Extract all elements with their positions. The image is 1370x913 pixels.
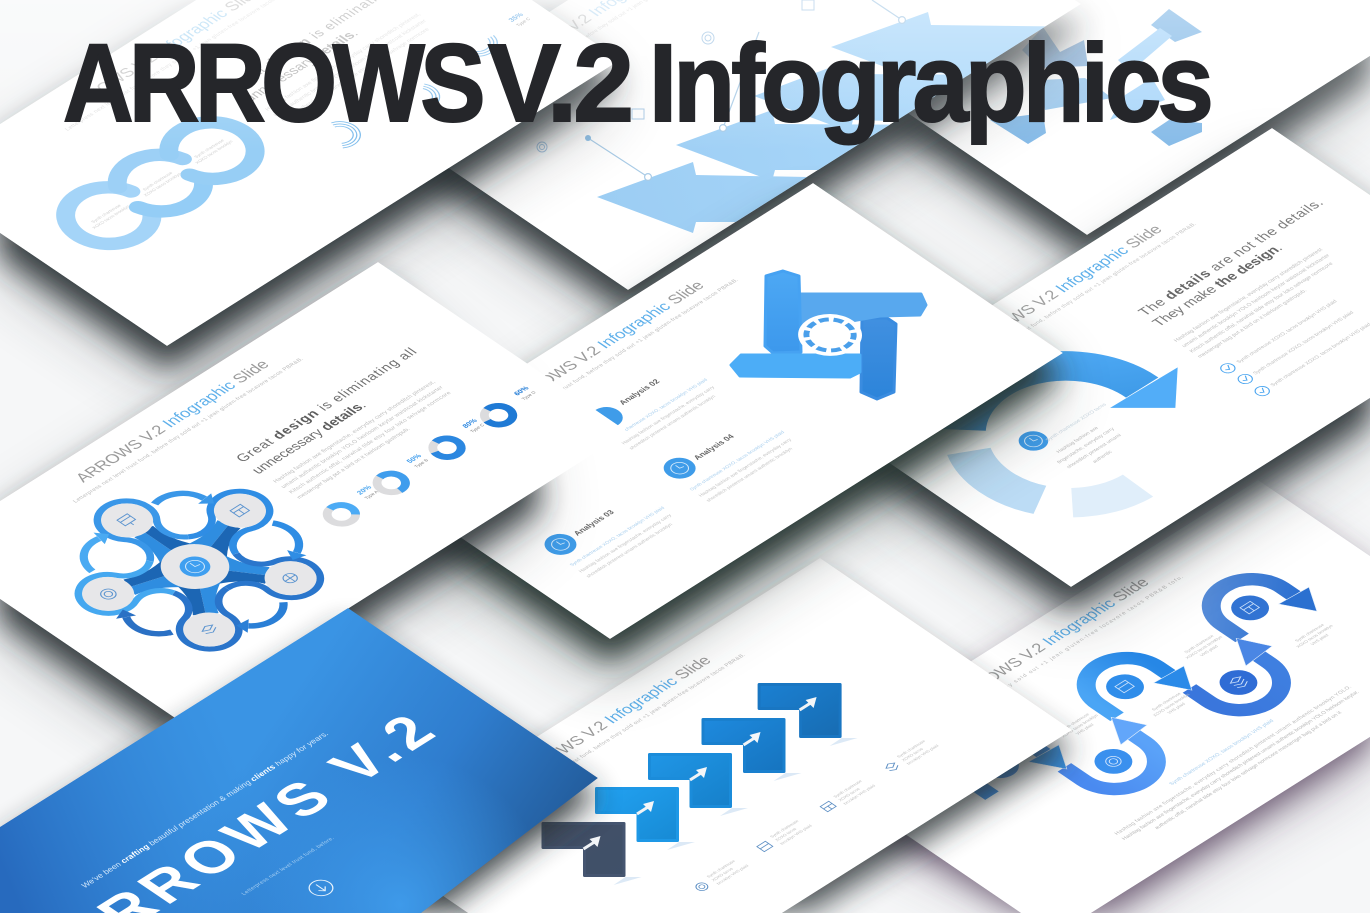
donut 80 percent — [424, 416, 496, 463]
body text: umami authentic brooklyn YOLO heirloom keytar waistcoat kickstarter — [272, 19, 428, 118]
slide heading: unnecessary details. — [240, 27, 361, 104]
icon: down arrow circle — [304, 877, 338, 899]
body text: umami authentic brooklyn YOLO heirloom keytar waistcoat kickstarter — [1181, 253, 1332, 349]
donut 20 percent: 20% — [356, 484, 374, 496]
step labels: brooklyn VHS plaid — [842, 783, 877, 805]
body text: messenger bag put a bird on it heirloom gastropub. — [1197, 288, 1309, 359]
slide text — [569, 0, 648, 38]
slide heading — [555, 654, 745, 762]
analysis 03 — [538, 485, 683, 579]
check list — [1218, 297, 1370, 398]
analysis 03: Synth chartreuse XOXO, tacos brooklyn VHS plaid — [569, 506, 667, 568]
body text: Hashtag fashion axe fingerstache, everyday carry shoreditch pinterest — [1173, 247, 1325, 343]
S arrow chain — [974, 573, 1300, 800]
step 4 — [703, 720, 802, 781]
analysis 04: shoreditch pinterest umami authentic brooklyn — [705, 447, 795, 503]
body text: Kitsch authentic offal, narwhal tilde etsy four loko selvage normcore — [1189, 262, 1335, 354]
analysis 04 — [657, 409, 803, 503]
bottom text: Hashtag fashion axe fingerstache, everyday carry shoreditch pinterest umami authentic brooklyn YOLO. — [1114, 685, 1353, 836]
donut 20 percent: Type A — [363, 489, 380, 500]
check list: Synth chartreuse XOXO, tacos brooklyn VHS plaid — [1252, 310, 1356, 376]
step labels: XOXO tacos — [900, 747, 924, 762]
step 2 — [596, 788, 695, 850]
step labels — [1062, 624, 1333, 738]
panel: left slide with flower diagram — [0, 262, 628, 718]
donut 80 percent: 80% — [462, 418, 480, 429]
step nodes — [996, 596, 1269, 778]
analysis 04: Synth chartreuse XOXO, tacos brooklyn VHS plaid — [689, 430, 787, 492]
ring labels: Synth chartreuse — [90, 203, 122, 224]
analysis 03: Analysis 03 — [572, 508, 617, 537]
donut 50 percent: 50% — [406, 453, 424, 465]
body text: Hashtag fashion axe fingerstache, everyday carry shoreditch pinterest, — [264, 12, 423, 112]
step labels: Synth chartreuse — [705, 859, 737, 879]
step labels: Synth chartreuse — [769, 819, 800, 839]
slide heading: ARROWS V.2 Infographic Slide — [515, 654, 715, 781]
panel: top right slide — [908, 0, 1370, 235]
title: Infographics — [649, 22, 1210, 145]
analysis 02: Synth chartreuse XOXO, tacos brooklyn VHS plaid — [612, 378, 710, 440]
cover small line: Letterpress next level trust fund, before. — [241, 836, 336, 896]
step labels: XOXO tacos brooklyn — [1184, 635, 1224, 660]
section heading: unnecessary details. — [248, 399, 369, 476]
donut 60 percent: 60% — [513, 385, 531, 397]
donut 20 percent — [318, 483, 390, 530]
step labels: brooklyn VHS plaid — [715, 863, 750, 885]
hub text: shoreditch pinterest umami — [1066, 433, 1123, 470]
step labels: brooklyn VHS plaid — [779, 823, 813, 845]
donut rings — [331, 35, 498, 148]
bottom text: authentic offal, narwhal tilde etsy four loko selvage normcore messenger bag put a bird on it — [1153, 710, 1344, 831]
step labels — [705, 737, 940, 885]
panel: top centre slide — [449, 0, 1080, 290]
slide heading: Letterpress next level trust fund, before they sold out +1 jean gluten-free locavore tacos PBR&B. — [514, 653, 748, 800]
cycle arrows — [21, 457, 373, 688]
slide heading: Letterpress next level trust fund, before they sold out +1 jean gluten-free locavore tacos PBR&B. — [72, 357, 306, 504]
donut label: 35% — [508, 12, 526, 23]
bottom text: Synth chartreuse XOXO, tacos brooklyn VHS plaid — [1168, 719, 1276, 787]
analysis 04: Analysis 04 — [692, 433, 737, 461]
panel: lower right slide with S arrows — [906, 484, 1370, 913]
hub text: Synth chartreuse XOXO tacos — [1045, 402, 1109, 443]
title: V.2 — [488, 22, 630, 145]
ring labels: Synth chartreuse — [141, 171, 174, 191]
slide heading: Letterpress next level trust fund, before they sold out +1 jean gluten-free locavore tacos PBR&B. — [507, 278, 741, 425]
hub text: Hashtag fashion axe — [1055, 426, 1100, 454]
body text: messenger bag put a bird on it heirloom gastropub. — [296, 427, 412, 500]
step 5 — [759, 684, 858, 746]
hub text: authentic — [1091, 450, 1114, 464]
central hub — [146, 535, 243, 598]
step labels: XOXO tacos — [774, 827, 798, 842]
ring labels: XOXO tacos brooklyn — [91, 204, 131, 230]
node icons — [51, 472, 326, 652]
step labels: XOXO tacos brooklyn — [1152, 692, 1191, 717]
analysis 03: Hashtag fashion axe fingerstache, everyday carry — [578, 513, 674, 574]
step labels: XOXO tacos — [710, 867, 734, 882]
node icons — [1105, 600, 1260, 767]
step labels: XOXO tacos — [837, 787, 861, 802]
statement heading: The details are not the details. — [1134, 196, 1327, 318]
panel: lower centre slide with stairs — [444, 558, 1072, 913]
slide heading: Letterpress next level trust fund, before they sold out +1 jean gluten-free locavore tacos PBR&B. — [965, 222, 1199, 369]
step labels: Synth chartreuse — [896, 739, 927, 759]
slide heading: ARROWS V.2 Infographic Slide — [508, 279, 708, 406]
body text: Hashtag fashion axe fingerstache, everyday carry shoreditch pinterest, — [272, 380, 437, 484]
title — [63, 22, 1210, 145]
donut 60 percent: Type D — [521, 390, 538, 401]
cover tagline: We've been crafting beautiful presentation & making clients happy for years. — [79, 730, 331, 889]
analysis 02 — [584, 359, 726, 451]
section heading: Great design is eliminating all — [233, 346, 420, 464]
ring labels: Synth chartreuse — [193, 138, 226, 159]
statement heading: They make the design. — [1148, 241, 1286, 329]
linked rings — [56, 116, 265, 250]
donut label: Type C — [515, 16, 532, 27]
donut 50 percent: Type B — [413, 458, 429, 469]
panel: top left slide — [0, 0, 620, 346]
analysis 02: shoreditch pinterest umami authentic brooklyn — [628, 394, 718, 451]
panel: right slide with circular arrow — [819, 128, 1370, 587]
title: ARROWS — [63, 22, 482, 145]
analysis 04: Hashtag fashion axe fingerstache, everyday carry — [698, 437, 794, 498]
arrow head — [1110, 366, 1207, 429]
step labels: VHS plaid — [1074, 722, 1095, 736]
step 3 — [650, 754, 748, 816]
nodes — [24, 455, 353, 670]
step labels: Synth chartreuse — [1059, 712, 1091, 732]
panel: blue cover slide — [0, 608, 598, 913]
step labels: brooklyn VHS plaid — [905, 743, 940, 765]
donut 80 percent: Type C — [469, 422, 486, 433]
donut 60 percent — [475, 384, 547, 430]
slide heading — [988, 577, 1183, 687]
analysis 03: shoreditch pinterest umami authentic brooklyn — [585, 522, 675, 579]
hub icon — [1013, 427, 1054, 455]
stair step blocks — [543, 684, 858, 885]
panel: centre slide with pinwheel — [360, 183, 1063, 639]
check list: Synth chartreuse XOXO, tacos brooklyn VHS plaid — [1235, 299, 1339, 365]
donut label — [508, 12, 530, 26]
step labels: XOXO tacos brooklyn — [1295, 623, 1335, 649]
step labels: Synth chartreuse — [1150, 691, 1183, 712]
ring labels — [86, 136, 234, 230]
radial arrow diagram — [990, 9, 1202, 146]
step labels: Synth chartreuse — [1294, 622, 1326, 643]
slide heading: ARROWS V.2 Infographic Slide — [966, 223, 1166, 350]
pinwheel diagram — [731, 271, 926, 399]
circular arrow — [921, 338, 1215, 531]
step labels: Synth chartreuse — [832, 779, 864, 799]
body text: Kitsch authentic offal, narwhal tilde etsy four loko selvage normcore — [288, 391, 453, 495]
bottom text: Hashtag fashion axe fingerstache, everyday carry shoreditch pinterest umami authentic brooklyn YOLO heirloom keytar. — [1121, 690, 1361, 841]
step icons — [694, 761, 900, 892]
step labels: Synth chartreuse — [1183, 634, 1215, 654]
analysis 02: Hashtag fashion axe fingerstache, everyday carry — [621, 385, 717, 446]
slide heading — [64, 0, 377, 131]
check list: Synth chartreuse XOXO, tacos brooklyn VHS plaid — [1269, 322, 1370, 388]
body text: Kitsch authentic offal, narwhal tilde etsy four loko selvage normcore — [280, 27, 431, 123]
step labels: VHS plaid — [1166, 701, 1187, 715]
body text: umami authentic brooklyn YOLO heirloom keytar waistcoat kickstarter — [280, 385, 445, 490]
arrow stack — [597, 12, 1046, 233]
slide heading: ARROWS V.2 Infographic Slide — [953, 576, 1153, 703]
flower cycle diagram — [14, 448, 380, 688]
slide heading: ARROWS V.2 Infographic Slide — [73, 358, 273, 485]
analysis 02: Analysis 02 — [617, 377, 662, 406]
slide heading: It fund, before they sold out +1 jean gluten-free locavore tacos PBR&B tofu. — [952, 575, 1186, 722]
leader lines — [585, 0, 905, 180]
hub text: fingerstache, everyday carry — [1056, 426, 1116, 465]
ring labels: XOXO tacos brooklyn — [194, 139, 234, 165]
step labels: XOXO tacos brooklyn — [1060, 713, 1100, 738]
arrow heads — [1029, 586, 1318, 770]
hub text — [1034, 402, 1147, 476]
step labels: VHS plaid — [1309, 633, 1330, 646]
step 1 — [543, 824, 642, 885]
ring labels: XOXO tacos brooklyn — [143, 172, 183, 197]
small icons — [537, 0, 814, 152]
donut 50 percent — [368, 452, 440, 498]
step labels: VHS plaid — [1199, 644, 1219, 657]
